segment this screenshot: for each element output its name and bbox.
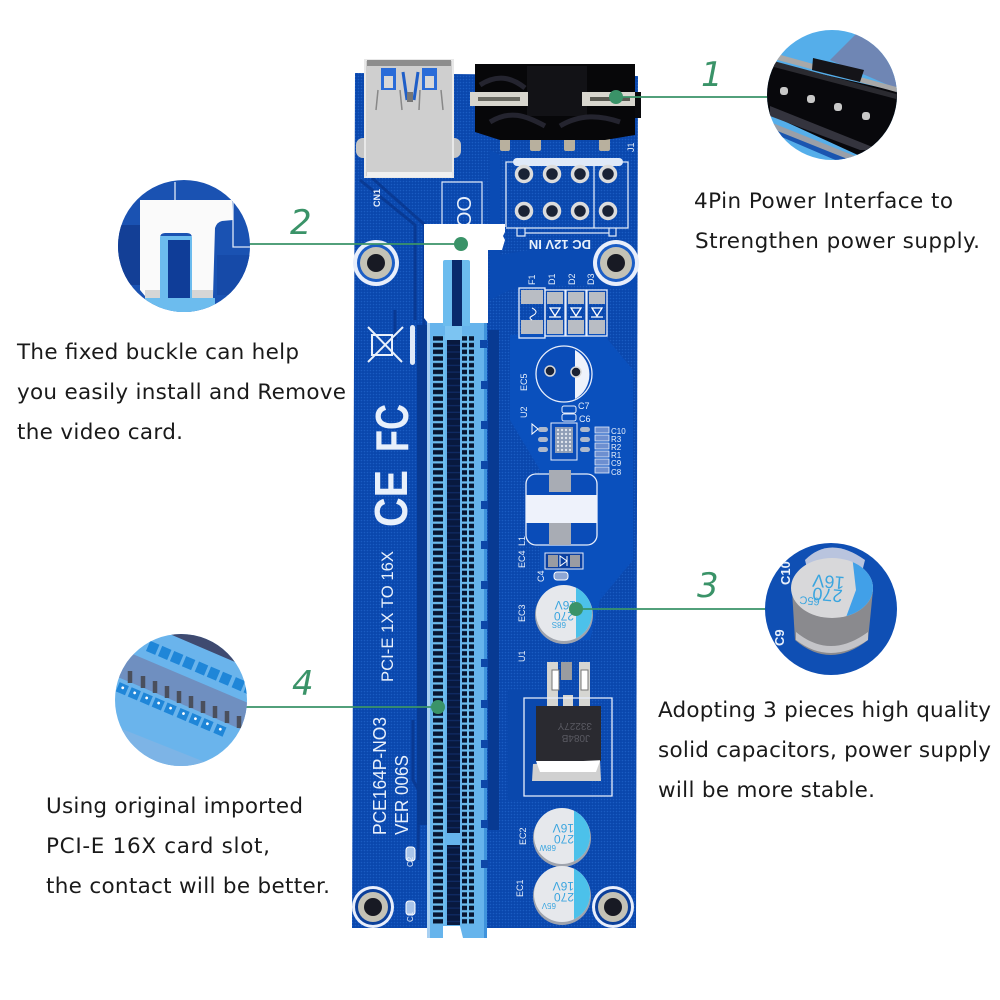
silk label CN1: CN1 bbox=[372, 189, 382, 207]
caption 1 bbox=[694, 189, 980, 254]
PCI-E 16X slot bbox=[427, 322, 488, 938]
resistor group bbox=[595, 427, 626, 477]
leader line 3 bbox=[576, 608, 767, 610]
capacitor footprint EC5: EC5 bbox=[519, 373, 529, 391]
power connector bbox=[470, 64, 641, 151]
voltage regulator U1: J084B bbox=[561, 732, 590, 743]
capacitor EC2: 68W bbox=[539, 843, 556, 852]
recycling mark bbox=[368, 325, 415, 365]
silk label PCI-E 1X TO 16X: PCI-E 1X TO 16X bbox=[378, 551, 397, 682]
fuse and diodes: D2 bbox=[567, 273, 577, 285]
capacitor EC2 bbox=[533, 808, 594, 867]
riser board bbox=[352, 60, 641, 938]
anchor dot 3 bbox=[569, 602, 583, 616]
silk box H00: OOH bbox=[452, 196, 474, 242]
silk labels C1 C2 bbox=[406, 847, 415, 922]
USB port bbox=[356, 60, 461, 177]
capacitor footprint EC5 bbox=[519, 346, 592, 418]
photo: power connector bbox=[760, 30, 900, 162]
photo: capacitor: 270 bbox=[812, 583, 843, 606]
copper traces bbox=[360, 178, 630, 860]
mounting holes bbox=[352, 240, 639, 928]
caption 3: solid capacitors, power supply bbox=[658, 738, 991, 763]
capacitor EC3 bbox=[535, 583, 596, 644]
fuse and diodes: D1 bbox=[547, 273, 557, 285]
voltage regulator U1 bbox=[517, 650, 612, 796]
diode and C4: EC3 bbox=[517, 604, 527, 622]
voltage regulator U1: U1 bbox=[517, 650, 527, 662]
leader line 2 bbox=[248, 243, 461, 245]
inductor L1 bbox=[517, 470, 597, 568]
resistor group: R1 bbox=[611, 451, 622, 460]
control chip U2: C6 bbox=[579, 414, 591, 424]
callout 2 bbox=[118, 180, 468, 316]
resistor group: R3 bbox=[611, 435, 622, 444]
anchor dot 2 bbox=[454, 237, 468, 251]
resistor group: R2 bbox=[611, 443, 622, 452]
resistor group: C9 bbox=[611, 459, 622, 468]
caption 3 bbox=[658, 698, 991, 803]
dark power planes bbox=[490, 150, 636, 300]
caption 2: the video card. bbox=[17, 420, 183, 445]
callout 3 bbox=[569, 543, 897, 675]
callout 4 bbox=[115, 634, 445, 766]
number 1: 1 bbox=[701, 55, 723, 95]
capacitor EC3: 270 bbox=[554, 609, 574, 623]
number 4: 4 bbox=[292, 664, 314, 704]
caption 4: Using original imported bbox=[46, 794, 303, 819]
anchor dot 1 bbox=[609, 90, 623, 104]
caption 4: PCI-E 16X card slot, bbox=[46, 834, 270, 859]
caption 4: the contact will be better. bbox=[46, 874, 330, 899]
control chip U2: C7 bbox=[578, 401, 590, 411]
photo: slot contacts bbox=[115, 634, 247, 766]
voltage regulator U1: 33227Y bbox=[557, 720, 592, 731]
capacitor EC1: 16V bbox=[553, 879, 574, 893]
capacitor EC1: 270 bbox=[554, 890, 574, 904]
capacitor footprint EC5: U2 bbox=[519, 406, 529, 418]
leader line 4 bbox=[245, 706, 438, 708]
fixed buckle bbox=[424, 224, 505, 326]
caption 4 bbox=[46, 794, 330, 899]
DC 12V IN header: DC 12V IN bbox=[529, 237, 591, 252]
capacitor EC2: 270 bbox=[554, 832, 574, 846]
silk label version: VER 006S bbox=[392, 755, 412, 835]
photo: buckle bbox=[118, 180, 250, 316]
CE logo: CE bbox=[365, 470, 417, 527]
number 2: 2 bbox=[290, 203, 312, 243]
diode and C4: C4 bbox=[536, 570, 546, 582]
inductor L1: EC4 bbox=[517, 550, 527, 568]
caption 3: will be more stable. bbox=[658, 778, 875, 803]
photo: capacitor bbox=[765, 543, 897, 675]
silk labels C1 C2: C1 bbox=[406, 911, 415, 922]
silk labels C1 C2: C2 bbox=[406, 856, 415, 867]
PCB bbox=[352, 73, 638, 928]
capacitor EC1: 65V bbox=[541, 901, 556, 910]
DC 12V IN header bbox=[506, 158, 628, 252]
silk box H00 bbox=[442, 182, 482, 242]
fuse and diodes: F1 bbox=[527, 274, 537, 285]
photo: capacitor: C10 bbox=[778, 561, 793, 585]
capacitor EC3: 16V bbox=[555, 598, 576, 612]
diode and C4 bbox=[517, 553, 583, 622]
control chip U2 bbox=[532, 401, 591, 460]
caption 3: Adopting 3 pieces high quality bbox=[658, 698, 991, 723]
leader line 1 bbox=[616, 96, 768, 98]
photo: capacitor: 16V bbox=[812, 570, 845, 593]
caption 1: 4Pin Power Interface to bbox=[694, 189, 953, 214]
capacitor EC1 bbox=[533, 866, 594, 925]
silk label model: PCE164P-NO3 bbox=[370, 717, 390, 835]
resistor group: C8 bbox=[611, 468, 622, 477]
capacitor EC3: 68S bbox=[552, 620, 566, 629]
photo: capacitor: C9 bbox=[772, 629, 787, 646]
number 3: 3 bbox=[697, 566, 719, 606]
silk label J1: J1 bbox=[626, 142, 636, 152]
FCC logo: FC bbox=[366, 404, 418, 452]
photo: capacitor: 65C bbox=[799, 593, 820, 607]
capacitor EC2: 16V bbox=[553, 821, 574, 835]
fuse and diodes bbox=[519, 273, 607, 338]
fuse and diodes: D3 bbox=[586, 273, 596, 285]
inductor L1: L1 bbox=[517, 536, 527, 546]
anchor dot 4 bbox=[431, 700, 445, 714]
caption 2 bbox=[16, 340, 346, 445]
resistor group: C10 bbox=[611, 427, 626, 436]
silk label EC1: EC1 bbox=[515, 879, 525, 897]
caption 2: you easily install and Remove bbox=[17, 380, 346, 405]
silk label EC2: EC2 bbox=[518, 827, 528, 845]
callout 1 bbox=[609, 30, 900, 162]
caption 2: The fixed buckle can help bbox=[16, 340, 299, 365]
dark channels beside slot bbox=[417, 325, 499, 830]
caption 1: Strengthen power supply. bbox=[695, 229, 980, 254]
